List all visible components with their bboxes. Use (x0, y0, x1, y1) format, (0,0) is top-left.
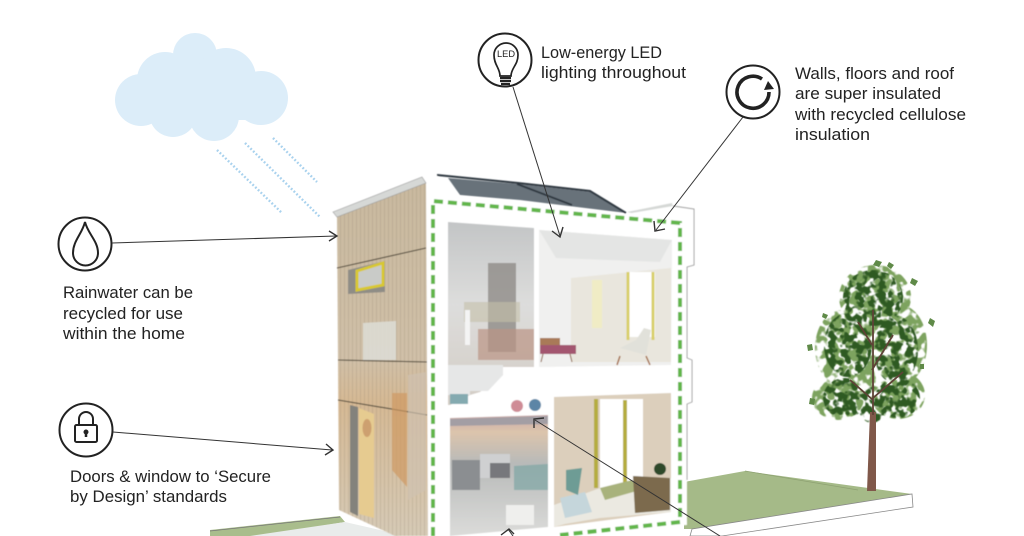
text: secure by design (70, 468, 271, 506)
icon: LED bulb: LED (497, 49, 516, 59)
wall section (424, 176, 694, 536)
facade pale panel (363, 321, 396, 360)
ground right (684, 471, 913, 536)
orange stripe (392, 393, 407, 487)
text: LED lighting (541, 44, 686, 82)
text: insulation (794, 65, 966, 144)
text: rainwater: within the home (62, 325, 185, 343)
door surround (350, 405, 358, 516)
facade seams (337, 248, 427, 415)
tree trunk (867, 412, 876, 491)
arrows (112, 87, 743, 536)
text: rainwater: recycled for use (63, 305, 183, 323)
facade (337, 183, 428, 536)
ground left (210, 516, 400, 536)
text: insulation: insulation (795, 126, 870, 144)
icon: water drop (58, 218, 112, 270)
cloud (115, 33, 288, 141)
upper left room (448, 222, 534, 405)
armchair (620, 328, 651, 355)
text: rainwater: Rainwater can be (63, 284, 193, 302)
upper right room (539, 230, 672, 367)
text: insulation: with recycled cellulose (794, 106, 966, 124)
arrow: rainwater (112, 231, 337, 243)
arrow: LED (513, 87, 563, 237)
scattered leaves (807, 260, 935, 405)
text: LED lighting: Low-energy LED (541, 44, 662, 62)
icon: padlock (60, 404, 112, 456)
tree (807, 260, 935, 491)
sideboard and bench (540, 338, 560, 346)
back roof (627, 203, 674, 216)
tree foliage (807, 260, 935, 423)
text: secure by design: by Design’ standards (70, 488, 227, 506)
text: secure by design: Doors & window to ‘Secure (70, 468, 271, 486)
door (359, 408, 374, 518)
arrow: security (113, 432, 333, 455)
pink and blue dots (511, 399, 541, 412)
lower right room (554, 393, 671, 527)
text: insulation: are super insulated (795, 85, 941, 103)
lower left room (450, 415, 548, 536)
arrow: bottom (501, 529, 514, 536)
text: LED lighting: lighting throughout (541, 64, 686, 82)
arrow: ventilation (534, 418, 720, 536)
rain (217, 138, 320, 217)
arrow: insulation (654, 117, 743, 231)
text: insulation: Walls, floors and roof (795, 65, 954, 83)
icon: LED bulb (478, 34, 532, 86)
yellow window (357, 263, 383, 290)
solar panels (437, 175, 626, 213)
roof cap (333, 177, 426, 217)
door round window (362, 419, 372, 437)
text: rainwater (62, 284, 193, 343)
green dashed boundary (433, 201, 680, 536)
house (333, 175, 694, 536)
window surround (348, 261, 385, 294)
icon: insulation cycle (726, 66, 780, 118)
